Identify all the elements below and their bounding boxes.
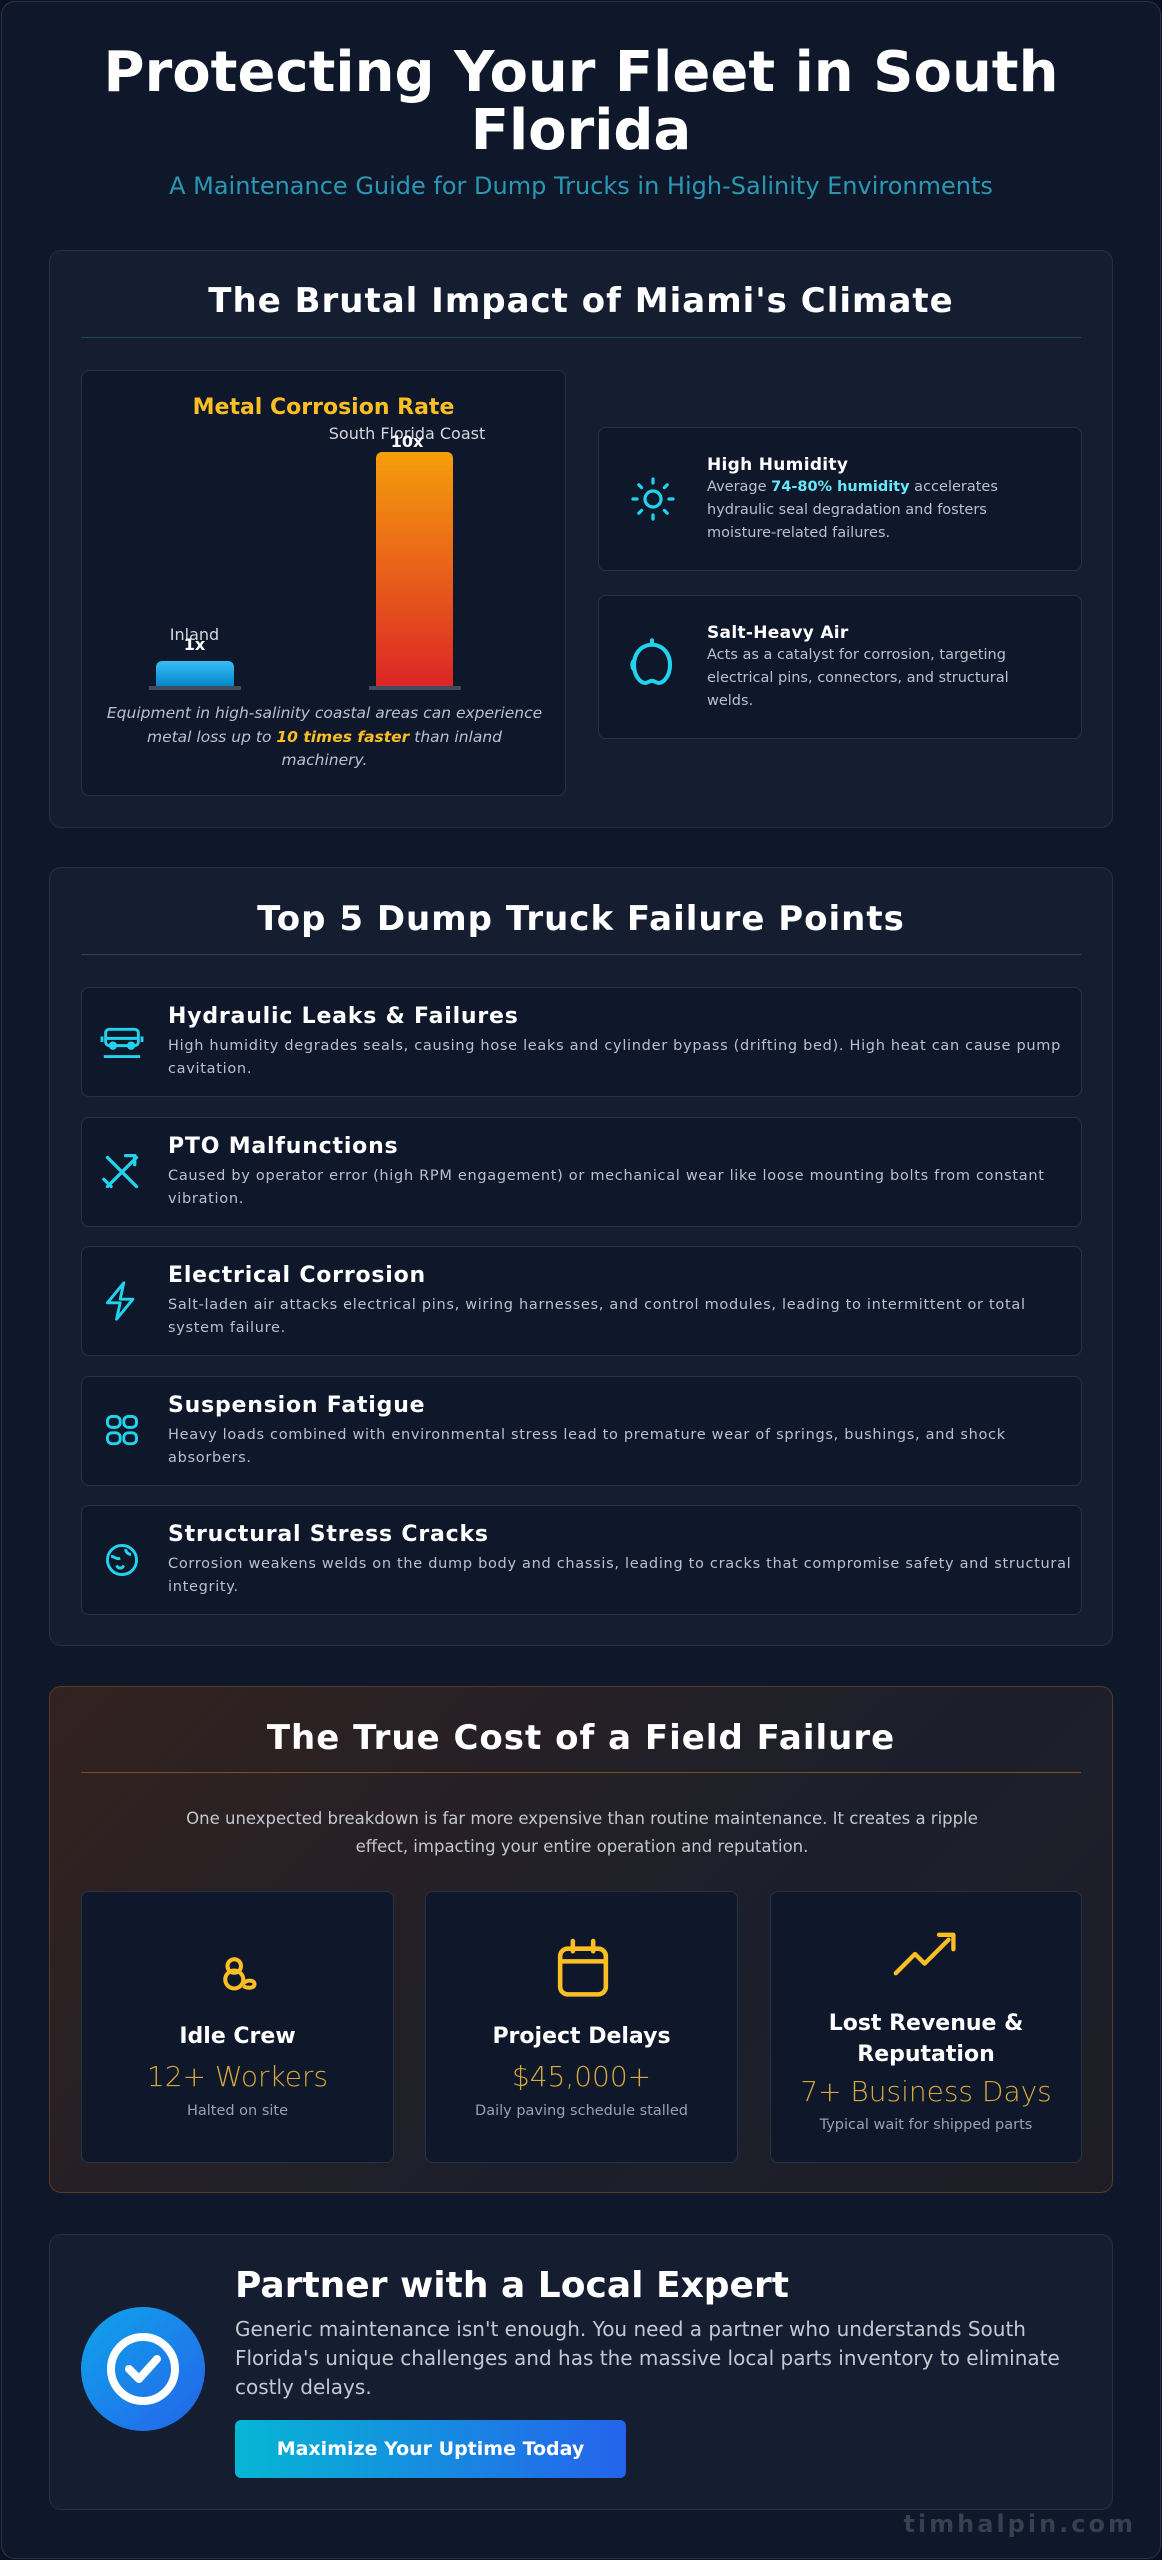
card: lost revenue — [770, 1891, 1082, 2163]
item: electrical — [81, 1246, 1082, 1356]
heading: partner: Partner with a Local Expert — [235, 2265, 789, 2306]
panel: climate impact — [49, 250, 1113, 828]
item: PTO — [81, 1117, 1082, 1227]
text: high humidity: High Humidity — [707, 455, 848, 475]
bar: south florida coast: South Florida Coast — [329, 424, 485, 443]
card: idle crew: 12+ Workers — [147, 2060, 328, 2093]
item: electrical: Electrical Corrosion — [168, 1263, 426, 1288]
panel: true cost — [49, 1686, 1113, 2193]
item: suspension: Heavy loads combined with environmental stress lead to premature wear of springs, bushings, and shock absorbers. — [168, 1427, 1006, 1466]
text: salt air: Salt-Heavy Air — [707, 623, 849, 643]
icon: calendar — [558, 1938, 608, 1997]
heading: climate: The Brutal Impact of Miami's Climate — [208, 281, 954, 321]
item: PTO: Caused by operator error (high RPM engagement) or mechanical wear like loose mounting bolts from constant vibration. — [168, 1168, 1045, 1207]
panel: partner CTA — [49, 2234, 1113, 2510]
card: lost revenue: Reputation — [857, 2042, 995, 2067]
card: project delays: Project Delays — [492, 2024, 671, 2049]
card: high humidity — [598, 427, 1082, 571]
item: hydraulic: High humidity degrades seals, causing hose leaks and cylinder bypass (drifting bed). High heat can cause pump cavitation. — [168, 1038, 1061, 1077]
watermark: timhalpin.com — [903, 2510, 1136, 2538]
bar: inland: Inland — [170, 625, 219, 644]
text: salt air: Acts as a catalyst for corrosion, targeting electrical pins, connectors, and structural welds. — [707, 647, 1009, 709]
card: lost revenue: 7+ Business Days — [800, 2075, 1052, 2108]
body text: Generic maintenance isn't enough. You need a partner who understands South Florida's unique challenges and has the massive local parts inventory to eliminate costly delays. — [235, 2317, 1060, 2399]
button: CTA: Maximize Your Uptime Today — [277, 2438, 584, 2460]
subtitle: A Maintenance Guide for Dump Trucks in High-Salinity Environments — [169, 172, 993, 200]
item: suspension: Suspension Fatigue — [168, 1393, 425, 1418]
heading: true cost: The True Cost of a Field Failure — [267, 1718, 895, 1758]
bar: inland: 1x — [184, 635, 205, 654]
button: CTA — [235, 2420, 626, 2478]
card: idle crew — [81, 1891, 394, 2163]
title: Protecting Your Fleet in South — [104, 40, 1058, 105]
item: suspension — [81, 1376, 1082, 1486]
icon: droplet — [630, 638, 672, 685]
bar: inland — [149, 625, 241, 690]
chart title: Metal Corrosion Rate — [193, 395, 454, 420]
card: project delays: $45,000+ — [512, 2060, 651, 2093]
card: salt-heavy air — [598, 595, 1082, 739]
icon: sun — [631, 477, 675, 521]
card: idle crew: Idle Crew — [179, 2024, 296, 2049]
item: hydraulic — [81, 987, 1082, 1097]
card: project delays — [425, 1891, 738, 2163]
item: electrical: Salt-laden air attacks electrical pins, wiring harnesses, and control modules, leading to intermittent or total system failure. — [168, 1297, 1026, 1336]
item: structural: Structural Stress Cracks — [168, 1522, 489, 1547]
card: project delays: Daily paving schedule stalled — [475, 2103, 688, 2119]
intro paragraph: One unexpected breakdown is far more expensive than routine maintenance. It creates a ripple effect, impacting your entire operation and reputation. — [186, 1809, 978, 1856]
chart caption: Equipment in high-salinity coastal areas can experience metal loss up to 10 times faster than inland machinery. — [107, 704, 542, 769]
icon: trend arrow — [894, 1932, 956, 1976]
icon: crew — [223, 1957, 256, 1990]
chart: metal corrosion rate — [81, 370, 566, 796]
title — [104, 40, 1058, 163]
bar: south florida coast: 10x — [391, 432, 423, 451]
item: PTO: PTO Malfunctions — [168, 1134, 398, 1159]
heading: failure points: Top 5 Dump Truck Failure Points — [257, 899, 905, 939]
icon: check badge — [81, 2307, 205, 2431]
item: hydraulic: Hydraulic Leaks & Failures — [168, 1004, 519, 1029]
text: high humidity: Average 74-80% humidity accelerates hydraulic seal degradation and fosters moisture-related failures. — [707, 479, 998, 541]
title: Florida — [471, 98, 691, 163]
card: idle crew: Halted on site — [187, 2103, 288, 2119]
item: structural: Corrosion weakens welds on the dump body and chassis, leading to cracks that compromise safety and structural integrity. — [168, 1556, 1071, 1595]
item: structural — [81, 1505, 1082, 1615]
card: lost revenue: Lost Revenue & — [829, 2011, 1023, 2036]
card: lost revenue: Typical wait for shipped parts — [820, 2117, 1032, 2133]
panel: failure points — [49, 867, 1113, 1646]
bar: south florida coast — [329, 424, 485, 690]
